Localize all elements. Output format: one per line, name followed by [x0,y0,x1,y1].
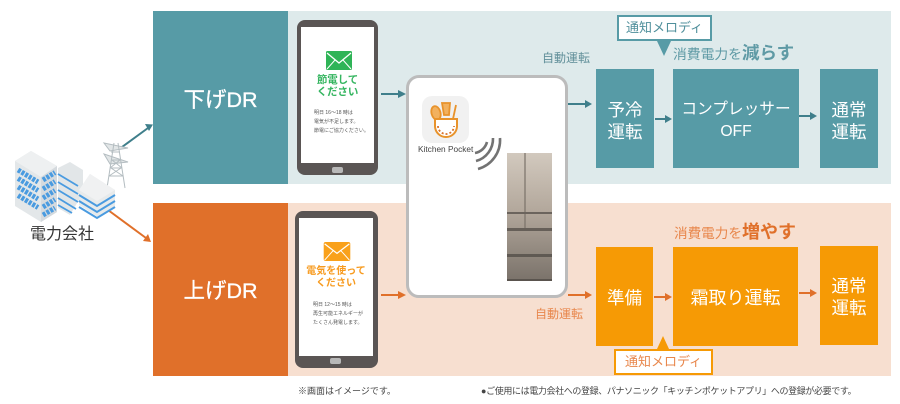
step: precool: 予冷 [608,100,642,120]
message body [313,302,363,326]
refrigerator [507,153,552,281]
message body: 再生可能エネルギーが [313,311,363,317]
label: auto operation (down): 自動運転 [542,51,590,65]
step: compressor off [673,69,799,168]
step: precool [596,69,654,168]
label: power company: 電力会社 [30,226,94,243]
phone home button [332,167,343,173]
step: normal operation (down): 通常 [832,100,866,120]
message body: たくさん発電します。 [313,320,363,326]
phone screen [301,27,374,163]
message heading: 節電して [317,74,358,86]
phone home button [330,358,341,364]
low building [79,174,115,217]
heading: increase power use: 消費電力を増やす [674,222,796,242]
heading: down DR: 下げDR [183,88,258,112]
message body [314,110,369,134]
icon: orange envelope [324,242,350,261]
label: auto operation (up): 自動運転 [535,307,583,321]
step: preparation [596,247,653,346]
message body: 明日 12～15 時は [313,302,352,308]
footnote: registration note: ●ご使用には電力会社への登録、パナソニック「キッチンポケットアプリ」への登録が必要です。 [481,386,856,396]
tall building [15,151,57,222]
heading: reduce power use: 消費電力を減らす [673,43,794,63]
step: precool: 運転 [608,122,642,142]
message body: 明日 16～18 時は [314,110,353,116]
phone screen [299,218,373,356]
phone: up DR message [295,211,378,368]
panel: down DR band [153,11,891,184]
step: compressor off: コンプレッサー [681,100,791,118]
icon: Kitchen Pocket app [422,96,469,143]
phone: down DR message [297,20,378,175]
message body: 節電にご協力ください。 [314,128,369,134]
message heading: 電気を使って [306,266,366,277]
heading: down DR [153,11,288,184]
icon: green envelope [326,51,352,70]
heading: up DR: 上げDR [183,279,258,303]
step: compressor off: OFF [720,122,752,140]
pylon [104,143,128,188]
step: preparation: 準備 [607,288,642,308]
middle building [58,162,83,215]
message heading [317,74,358,98]
step: defrost operation: 霜取り運転 [690,288,780,308]
callout: notification melody (down) [617,15,712,41]
step: normal operation (down): 運転 [832,122,866,142]
step: normal operation (up): 通常 [832,276,866,296]
callout: notification melody (up) [614,349,713,375]
message heading: ください [317,86,358,98]
panel: up DR band [153,203,891,376]
message heading [306,265,366,289]
step: normal operation (up): 運転 [832,298,866,318]
callout: notification melody (down): 通知メロディ [626,20,703,35]
footnote: image note: ※画面はイメージです。 [298,386,396,396]
heading: up DR [153,203,288,376]
message body: 電気が不足します。 [314,119,359,125]
step: normal operation (down) [820,69,878,168]
icon: power company buildings and pylon [15,142,128,222]
step: defrost operation [673,247,798,346]
step: normal operation (up) [820,246,878,345]
callout: notification melody (up): 通知メロディ [625,354,702,369]
panel: app and refrigerator [406,75,568,298]
app label: Kitchen Pocket [418,144,473,154]
message heading: ください [316,278,356,289]
